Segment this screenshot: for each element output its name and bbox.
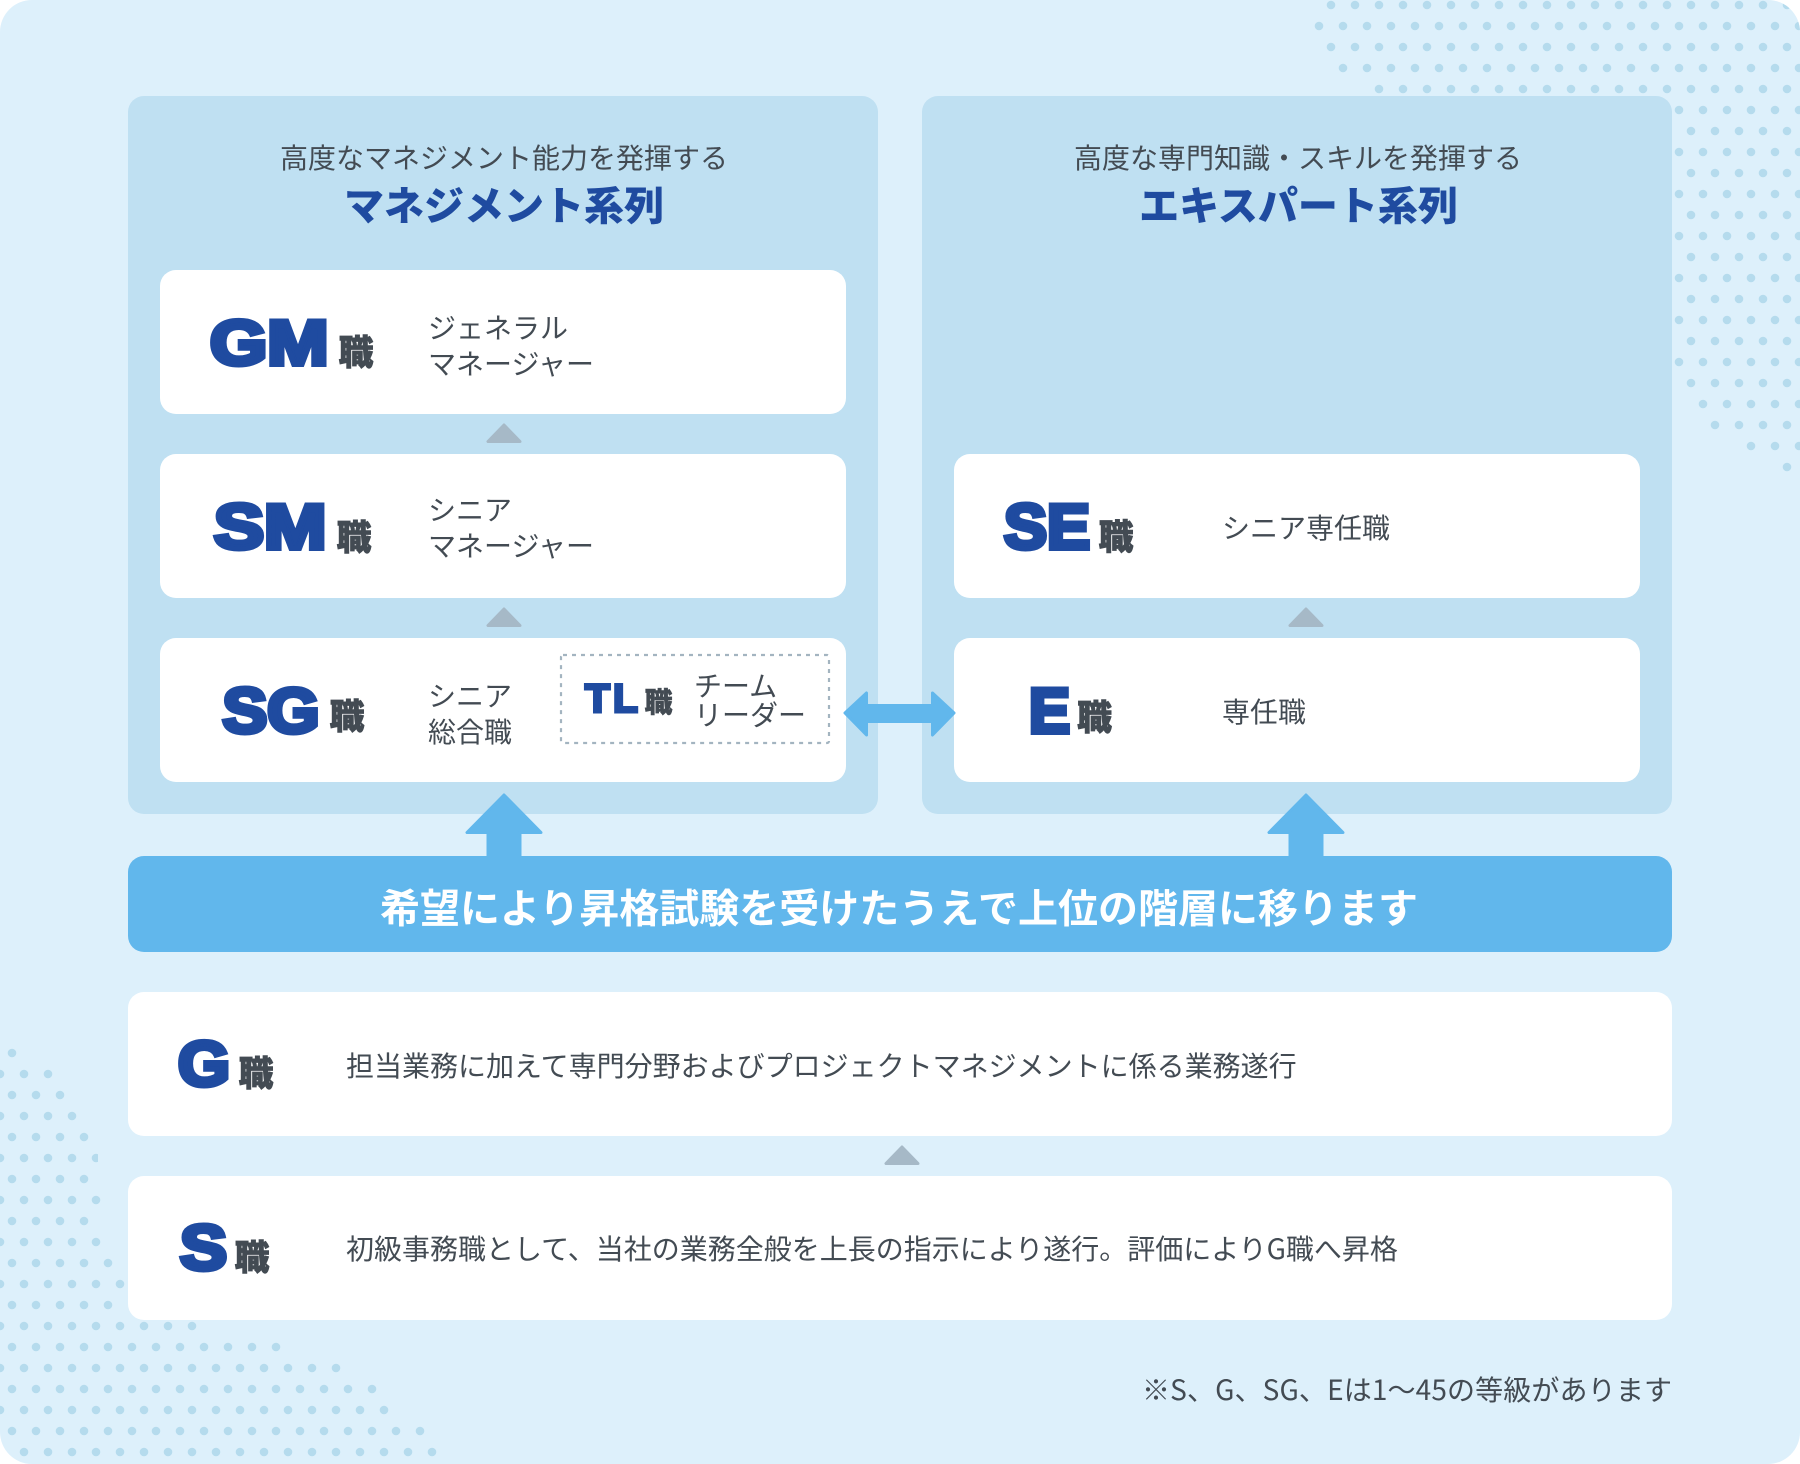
card: S: 初級事務職として、当社の業務全般を上長の指示により遂行。評価によりG職へ昇格 <box>346 1228 1398 1268</box>
arrow: GM to SM <box>488 425 520 442</box>
card: SM: シニア <box>428 489 512 529</box>
card: SM <box>160 454 846 598</box>
management subtitle: 高度なマネジメント能力を発揮する <box>280 137 728 177</box>
card: GM: ジェネラル <box>428 307 568 347</box>
arrow: two-way between SG and E <box>845 693 954 735</box>
card: E: 職 <box>1077 690 1112 741</box>
banner: promotion exam <box>128 856 1672 952</box>
card: SG: SG <box>222 676 320 746</box>
card: GM: 職 <box>338 325 374 376</box>
management heading: マネジメント系列 <box>344 174 664 232</box>
banner: promotion exam: 希望により昇格試験を受けたうえで上位の階層に移ります <box>380 876 1418 934</box>
card: GM: GM <box>210 308 328 378</box>
expert heading: エキスパート系列 <box>1139 174 1458 232</box>
TL sub-box: 職 <box>644 681 673 721</box>
arrow: up to E <box>1269 795 1343 858</box>
card: SG: シニア <box>428 675 512 715</box>
card: E <box>954 638 1640 782</box>
card: G: G <box>178 1030 230 1100</box>
expert subtitle: 高度な専門知識・スキルを発揮する <box>1074 137 1522 177</box>
card: G: 職 <box>238 1046 274 1097</box>
footnote: ※S、G、SG、Eは1〜45の等級があります <box>1142 1369 1672 1409</box>
TL sub-box <box>561 655 829 743</box>
card: SG <box>160 638 846 782</box>
card: S: S <box>180 1214 227 1284</box>
card: SE: SE <box>1004 492 1090 562</box>
card: GM <box>160 270 846 414</box>
card: SM: SM <box>214 492 326 562</box>
card: SG: 総合職 <box>428 711 512 751</box>
card: G: 担当業務に加えて専門分野およびプロジェクトマネジメントに係る業務遂行 <box>346 1045 1297 1085</box>
card: SE: 職 <box>1098 510 1134 560</box>
card: E: E <box>1029 676 1070 746</box>
panel: management track <box>128 96 878 814</box>
card: GM: マネージャー <box>428 343 594 383</box>
card: SG: 職 <box>330 689 365 740</box>
panel: expert track <box>922 96 1672 814</box>
arrow: E to SE <box>1290 609 1322 626</box>
card: SM: 職 <box>336 510 372 561</box>
card: SE <box>954 454 1640 598</box>
card: G <box>128 992 1672 1136</box>
arrow: up to SG <box>467 795 541 858</box>
TL sub-box: リーダー <box>694 694 806 734</box>
arrow: S to G <box>886 1147 918 1164</box>
arrow: SG to SM <box>488 609 520 626</box>
card: S <box>128 1176 1672 1320</box>
card: E: 専任職 <box>1222 691 1306 731</box>
card: SE: シニア専任職 <box>1222 507 1390 547</box>
card: SM: マネージャー <box>428 525 594 565</box>
card: S: 職 <box>234 1230 270 1281</box>
TL sub-box: TL <box>585 677 641 721</box>
TL sub-box: チーム <box>694 665 777 705</box>
